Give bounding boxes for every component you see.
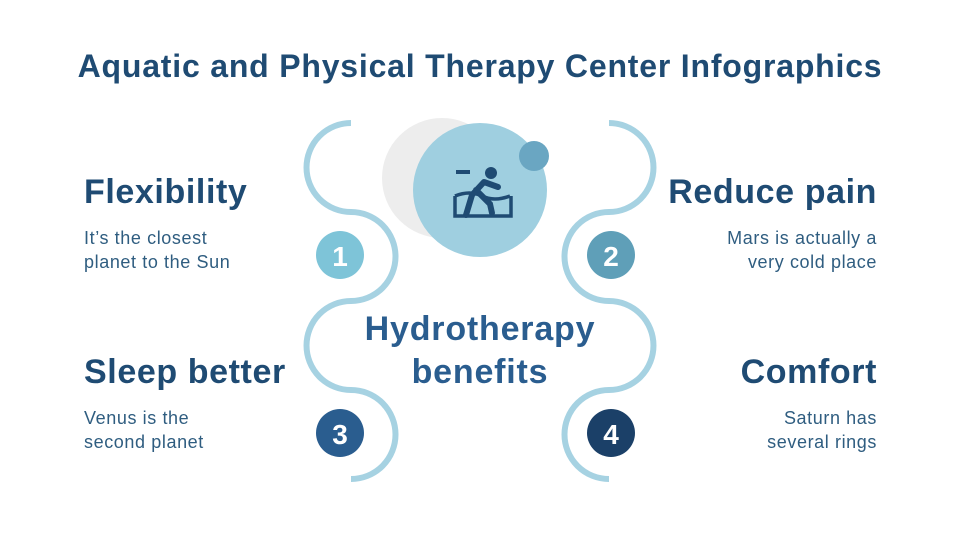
number 4: 4 bbox=[603, 419, 619, 450]
item 1: Flexibility bbox=[84, 173, 247, 211]
item 3: second planet bbox=[84, 432, 204, 452]
item 3: Sleep better bbox=[84, 353, 286, 391]
item 2: very cold place bbox=[748, 252, 877, 272]
item 2: Mars is actually a bbox=[727, 228, 877, 248]
center heading bbox=[365, 310, 595, 391]
number 3: 3 bbox=[332, 419, 348, 450]
item 1 bbox=[84, 173, 247, 272]
item 2 bbox=[668, 173, 877, 272]
item 4: several rings bbox=[767, 432, 877, 452]
item 3: Venus is the bbox=[84, 408, 189, 428]
number 3 bbox=[316, 409, 364, 457]
number 1: 1 bbox=[332, 241, 348, 272]
icon circle group bbox=[382, 118, 549, 257]
number 4 bbox=[587, 409, 635, 457]
item 4: Saturn has bbox=[784, 408, 877, 428]
item 1: It’s the closest bbox=[84, 228, 207, 248]
item 2: Reduce pain bbox=[668, 173, 877, 211]
wave: left bbox=[307, 123, 395, 479]
center heading: benefits bbox=[412, 353, 548, 391]
icon: aquatic therapy bbox=[455, 167, 511, 216]
center heading: Hydrotherapy bbox=[365, 310, 595, 348]
item 4: Comfort bbox=[741, 353, 877, 391]
item 3 bbox=[84, 353, 286, 452]
number 1 bbox=[316, 231, 364, 279]
item 1: planet to the Sun bbox=[84, 252, 230, 272]
number 2: 2 bbox=[603, 241, 619, 272]
title: Aquatic and Physical Therapy Center Infographics bbox=[78, 48, 882, 84]
item 4 bbox=[741, 353, 877, 452]
wave: right bbox=[564, 123, 653, 479]
number 2 bbox=[587, 231, 635, 279]
